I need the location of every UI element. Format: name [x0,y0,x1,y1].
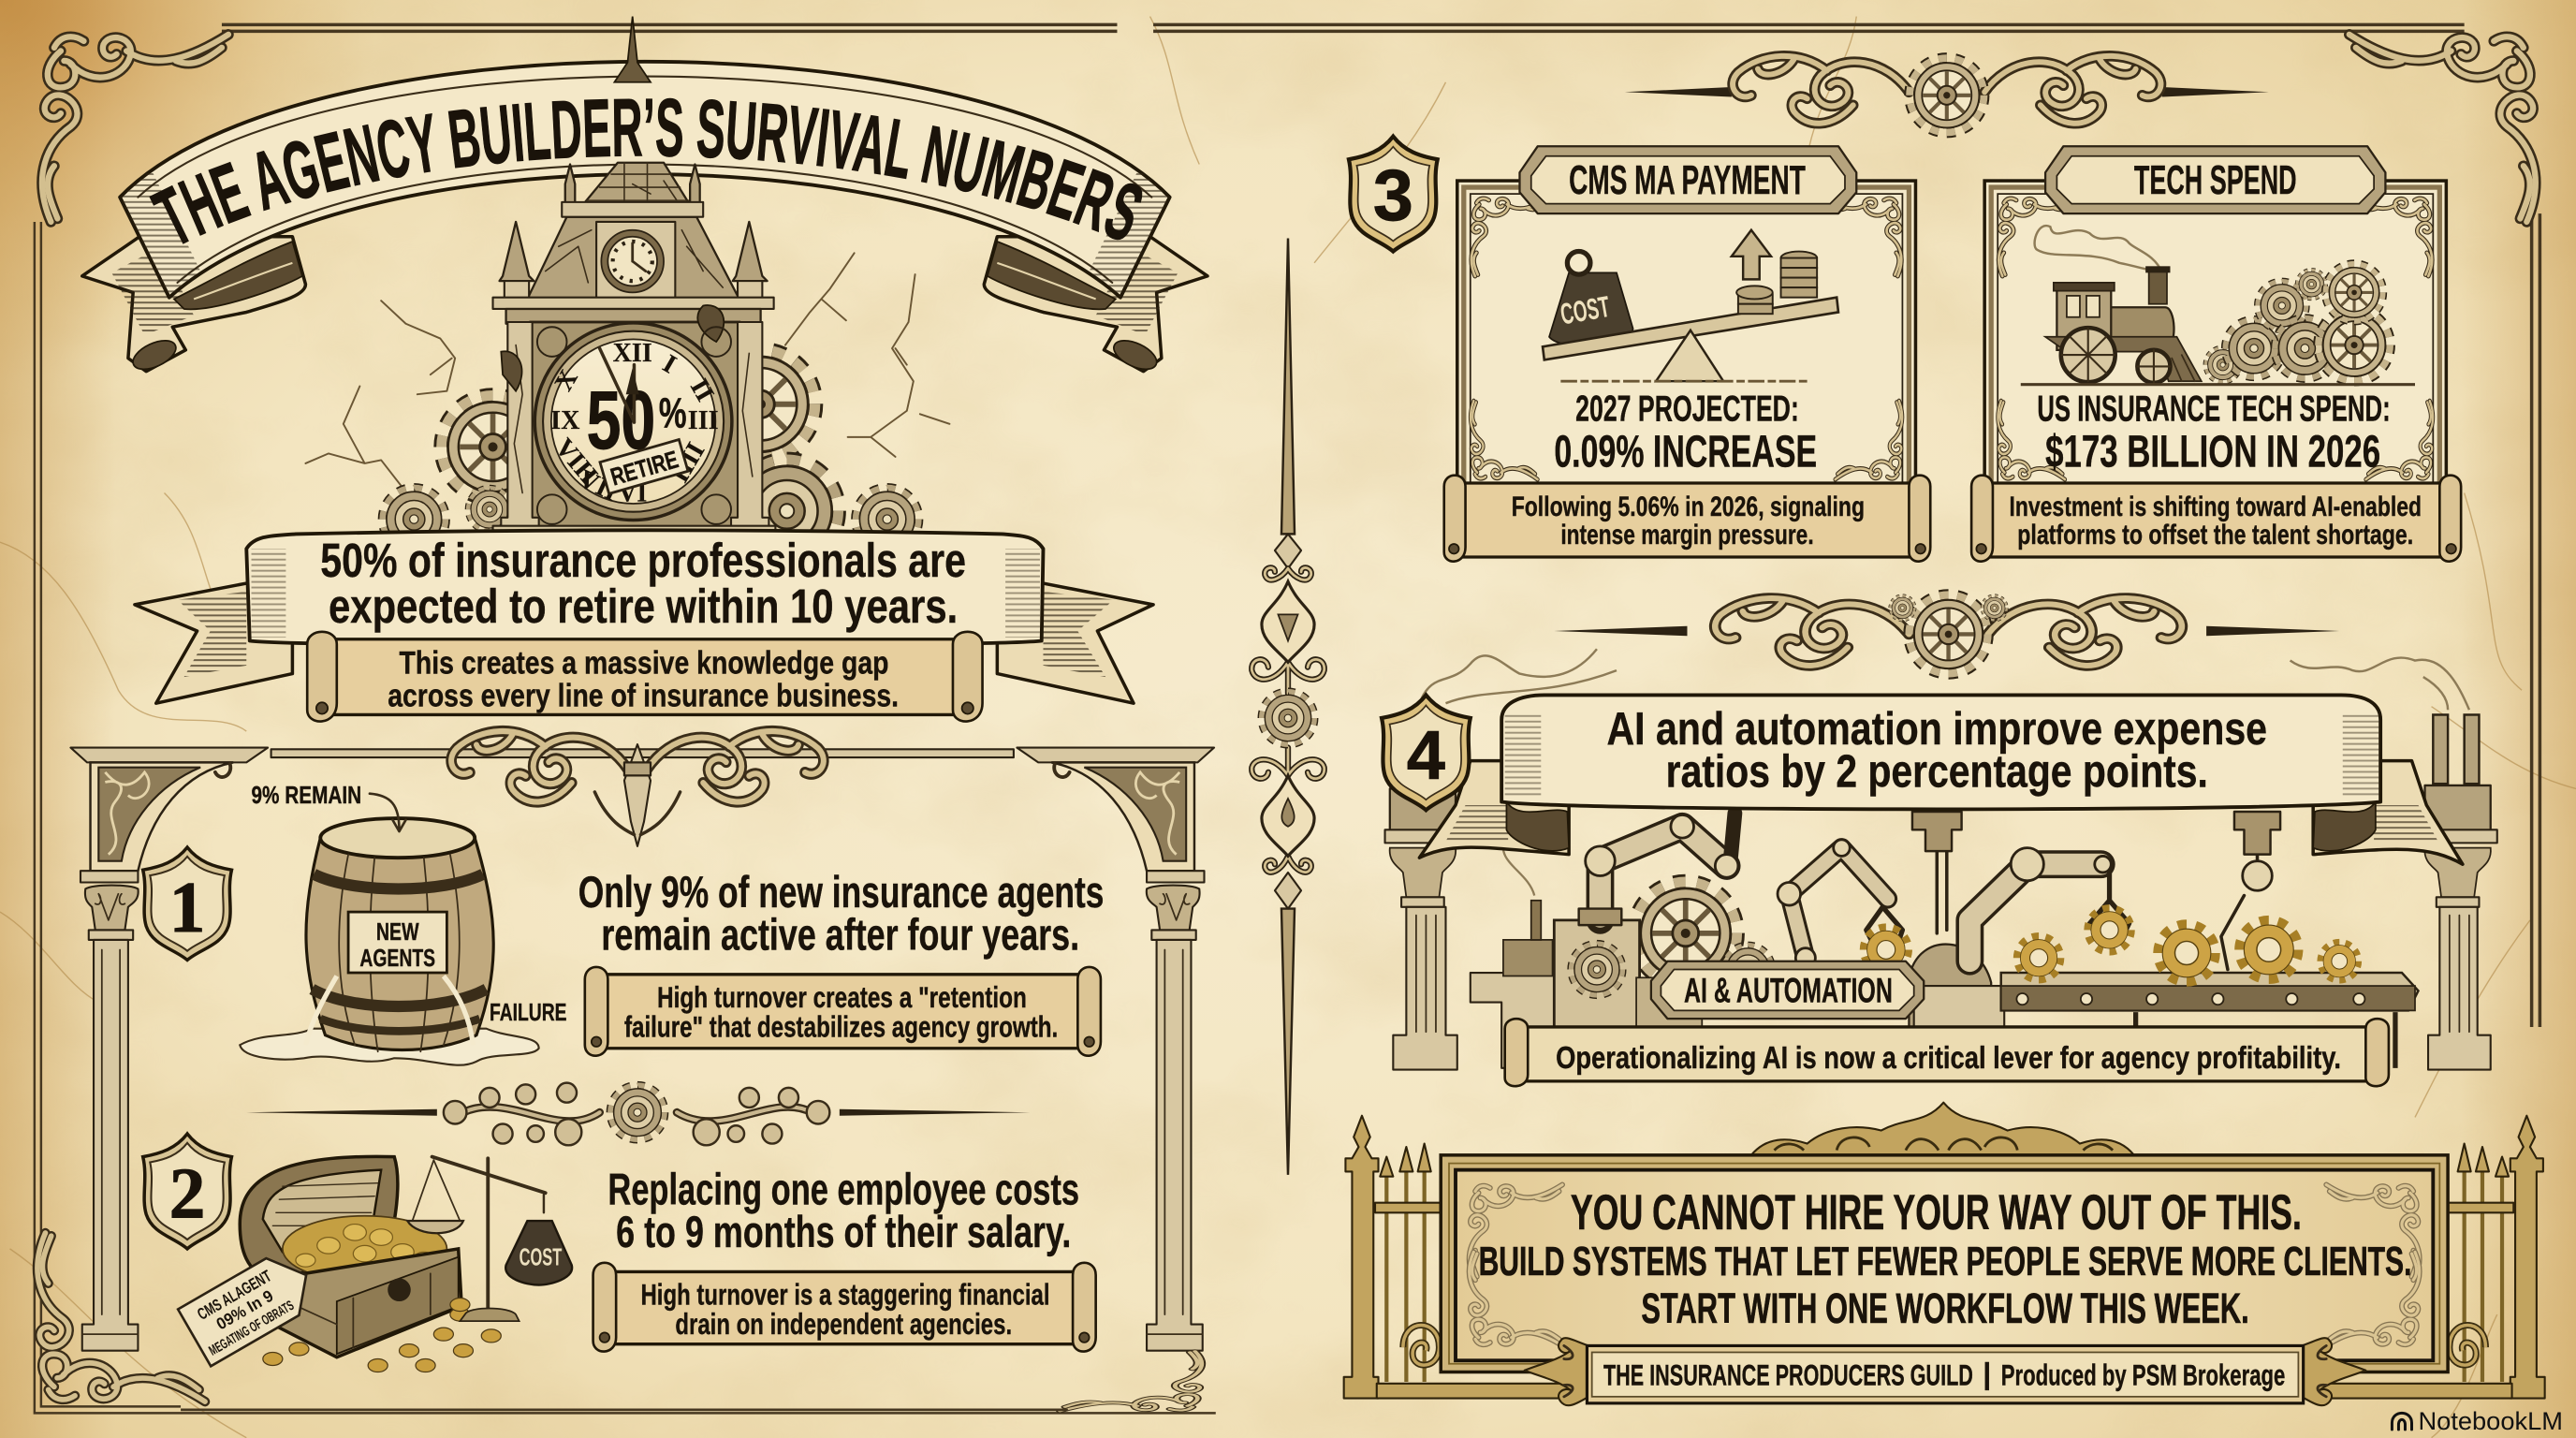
roman numerals: IX [550,406,579,435]
headline two [607,1165,1079,1257]
right gate [2441,1116,2545,1399]
item two [143,1134,1096,1372]
headline one [578,868,1104,960]
card: tech spend [1971,146,2461,562]
retire tag: RETIRE [607,445,681,492]
roman numerals: II [684,374,720,406]
shield 2: 2 [169,1153,205,1234]
divider between items [246,1083,1030,1145]
price tag: MEGATING OF OBRATS [207,1299,297,1359]
item one [143,783,1104,1065]
chimneys [2433,714,2479,784]
sub scroll: across every line of insurance business. [388,679,899,714]
headline two: Replacing one employee costs [607,1165,1079,1214]
cost weight [505,1221,572,1284]
footer plate: | [1983,1357,1991,1390]
left gate [1344,1116,1447,1399]
right column [2419,785,2497,1070]
headline: 50% of insurance professionals are [320,534,966,587]
title ribbon tails [82,237,1208,375]
banner four: AI and automation improve expense [1606,704,2267,755]
arch frame [70,748,1214,1351]
scroll one [585,967,1101,1056]
leaking barrel [240,818,539,1065]
clock hands [600,348,634,422]
top centre ornament [451,731,824,846]
pillars [501,322,539,531]
shield 4 [1382,695,1471,810]
card scroll: platforms to offset the talent shortage. [2017,520,2413,550]
failure label: FAILURE [490,998,567,1026]
fifty percent: 50 [587,374,655,466]
corner ornament top right [2349,35,2536,222]
roman numerals: X [549,365,584,396]
roman numerals: VII [574,464,622,507]
banner tails [1419,761,2463,864]
roman numerals: VI [618,478,647,507]
card scroll [1444,476,1930,562]
factory floor scroll: Operationalizing AI is now a critical lever for agency profitability. [1556,1041,2341,1076]
bottom corner ornaments [37,1233,1202,1411]
headline two: 6 to 9 months of their salary. [616,1208,1071,1257]
factory machines [1471,822,2004,1068]
NotebookLM watermark: NotebookLM [2419,1406,2563,1435]
banner four [1501,695,2380,809]
leaking barrel: AGENTS [359,944,435,972]
call to action text: START WITH ONE WORKFLOW THIS WEEK. [1641,1284,2249,1332]
price tag: 09% In 9 [212,1286,276,1333]
bottom rail [1377,1384,2512,1399]
robot arms [1579,812,2280,970]
roman numerals: I [658,349,681,379]
panel: item four [1382,649,2497,1086]
card text: 0.09% INCREASE [1554,426,1817,477]
roman numerals [549,339,720,507]
factory floor scroll [1505,1019,2389,1086]
title text: THE AGENCY BUILDER’S SURVIVAL NUMBERS [149,97,1142,244]
small clock [596,222,675,299]
conveyor belt and gears [1864,908,2419,1068]
smoke [1419,649,2469,710]
card text [2037,389,2391,477]
card text: US INSURANCE TECH SPEND: [2037,389,2391,429]
shield 3: 3 [1373,155,1413,236]
banner four: ratios by 2 percentage points. [1666,747,2208,798]
leaking barrel: NEW [376,917,419,946]
tower roof [578,163,694,211]
closing call to action panel [1344,1103,2545,1405]
shield 4: 4 [1407,716,1445,794]
treasure chest [240,1156,501,1372]
sub scroll [307,632,983,722]
cornice [493,298,774,309]
vertical divider [1251,238,1325,1175]
main statistic banner: expected to retire within 10 years. [329,580,958,633]
shield 3 [1349,137,1438,252]
roman numerals: III [688,406,719,435]
card header: TECH SPEND [2134,157,2297,203]
balance scale [407,1157,546,1321]
main statistic banner [135,530,1153,722]
card text: 2027 PROJECTED: [1575,389,1799,429]
card: CMS MA payment [1444,146,1930,562]
remain label and arrow: 9% REMAIN [252,783,361,809]
card text: $173 BILLION IN 2026 [2045,426,2380,477]
footer plate [1525,1338,2365,1405]
price tag: CMS ALAGENT [194,1267,274,1324]
roman numerals: IIII [666,438,710,488]
spire [614,17,651,82]
gears behind clock [382,349,919,563]
sub scroll: This creates a massive knowledge gap [399,646,889,682]
seesaw illustration: COST [1558,289,1612,331]
card frame [1457,181,1915,493]
banner tails [135,583,1153,703]
banner body [246,530,1043,646]
scroll one: High turnover creates a "retention [657,980,1027,1014]
call to action text [1479,1185,2411,1332]
title banner [80,17,1209,373]
card text [1554,389,1817,477]
middle right ornament [1554,594,2339,674]
roman numerals: VIII [549,433,603,490]
corner roundels [537,327,731,524]
title ribbon [120,62,1170,298]
left column [1385,788,1460,1070]
corner ornament top left [42,35,228,222]
frame [1441,1155,2448,1372]
card header [2045,146,2385,213]
scroll two: drain on independent agencies. [675,1307,1012,1341]
top crest [1751,1103,2134,1155]
scroll two [593,1263,1096,1352]
footer plate: Produced by PSM Brokerage [2001,1358,2285,1392]
card scroll [1971,476,2461,562]
shield 1: 1 [169,867,205,947]
cracks around clock [305,253,949,490]
clock tower illustration [382,163,919,563]
card scroll: Investment is shifting toward AI-enabled [2009,492,2422,522]
card header [1519,146,1856,213]
headline one: Only 9% of new insurance agents [578,868,1104,917]
top right ornament [1625,56,2269,133]
card scroll: Following 5.06% in 2026, signaling [1512,492,1865,522]
AI and automation plate [1651,961,1924,1019]
price tag [178,1245,322,1366]
shield 2 [143,1134,231,1249]
card scroll: intense margin pressure. [1560,520,1814,550]
big clock face: % [659,389,687,436]
footer plate: THE INSURANCE PRODUCERS GUILD [1603,1358,1973,1392]
remain label and arrow [252,783,406,831]
big clock face [534,323,732,520]
panel: items one and two [37,731,1214,1411]
panel: item three [1349,137,2461,562]
card header: CMS MA PAYMENT [1569,157,1806,203]
pediment [527,217,739,299]
scroll two: High turnover is a staggering financial [640,1278,1050,1312]
seesaw illustration [1543,230,1838,381]
locomotive and gears illustration [2021,226,2415,385]
roman numerals: XII [613,339,652,368]
card frame [1984,181,2446,493]
AI and automation plate: AI & AUTOMATION [1684,972,1893,1010]
headline one: remain active after four years. [601,910,1079,960]
clock body [531,322,739,531]
scroll one: failure" that destabilizes agency growth. [624,1009,1058,1043]
cost weight: COST [520,1242,562,1270]
shield 1 [143,847,231,961]
side spires [500,222,768,301]
